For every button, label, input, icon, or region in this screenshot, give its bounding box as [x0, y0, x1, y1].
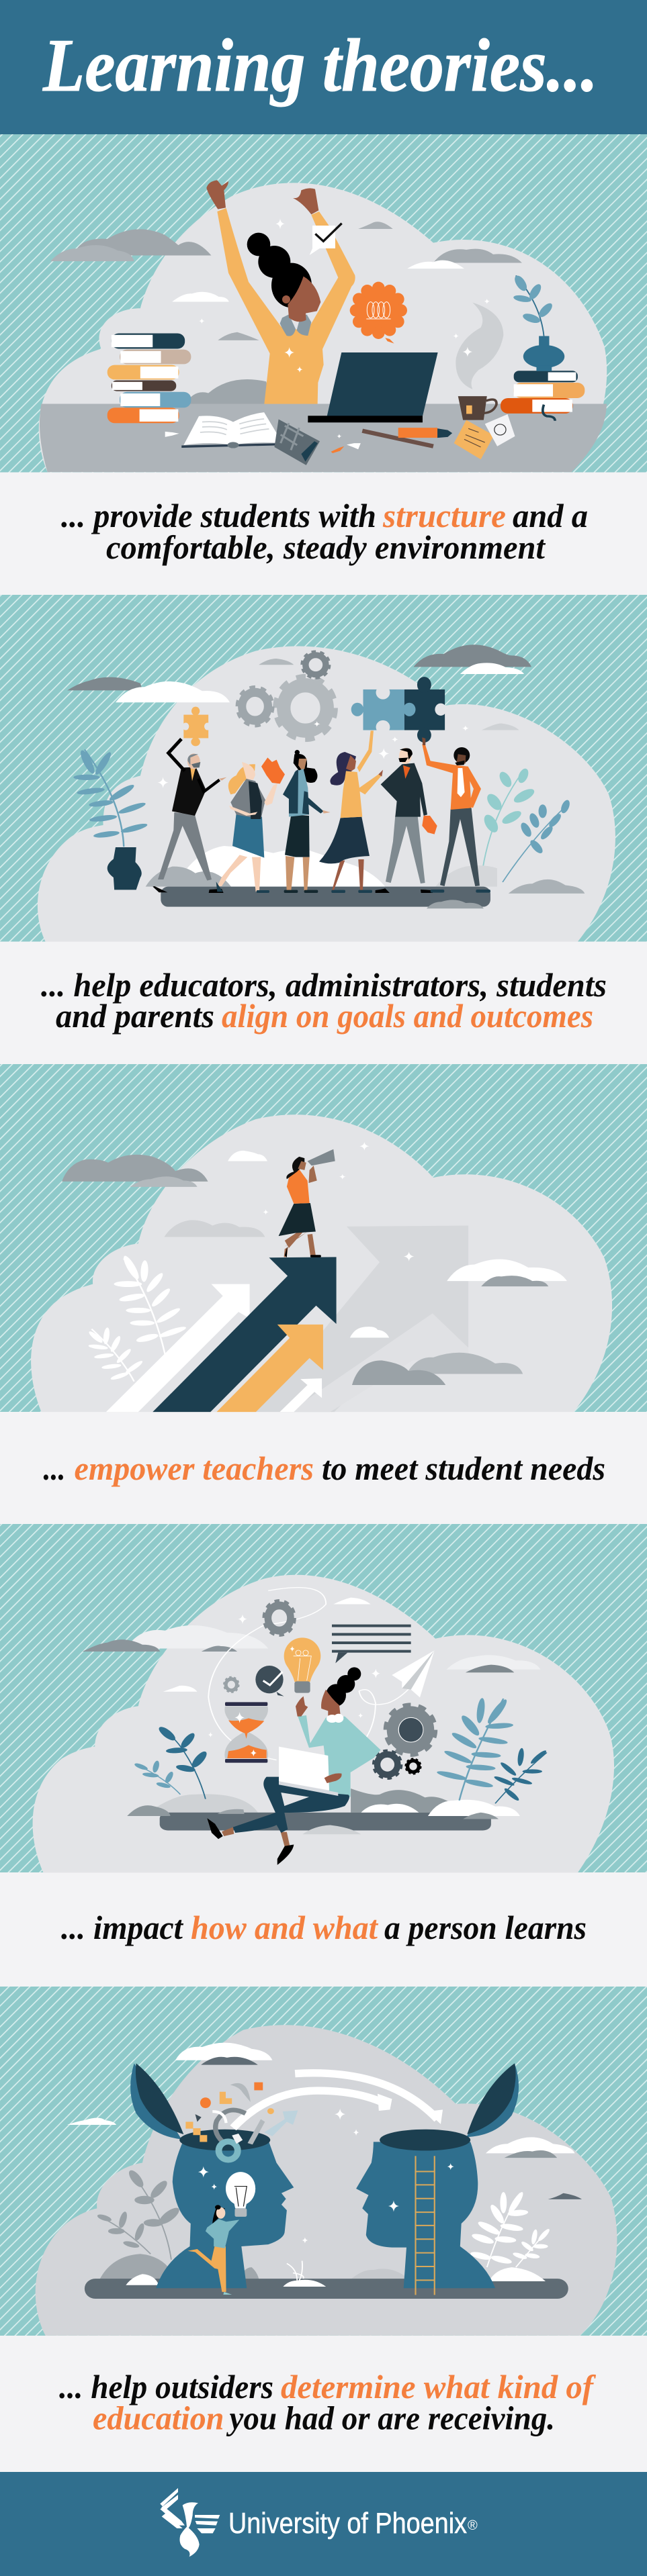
registered mark: ®	[468, 2518, 478, 2533]
left head	[130, 2063, 294, 2288]
cloud backdrop	[36, 2025, 617, 2336]
right head	[356, 2063, 519, 2288]
caption: determine education: you had or are receiving.	[226, 2399, 555, 2437]
steam	[456, 303, 503, 389]
white plant	[470, 2191, 551, 2267]
white hill and gray hills	[146, 846, 497, 887]
caption: structure: comfortable, steady environment	[106, 528, 546, 566]
caption: empower teachers: empower teachers	[74, 1449, 314, 1487]
caption: determine education: education	[93, 2399, 224, 2437]
large faded arrows	[256, 1226, 468, 1412]
panel: empowering teachers illustration	[0, 1064, 647, 1412]
puzzle pieces	[182, 677, 447, 746]
coffee cup	[458, 396, 497, 420]
person one: man holding piece	[153, 739, 226, 893]
right ferns	[481, 768, 571, 884]
panel: how and what a person learns illustration	[0, 1524, 647, 1872]
caption: align on goals	[41, 966, 607, 1035]
foreground clouds	[127, 1800, 520, 1834]
caption: how and what: a person learns	[384, 1909, 587, 1946]
lightbulb	[284, 1637, 320, 1693]
footer banner	[0, 2472, 647, 2576]
caption: empower teachers	[43, 1449, 605, 1487]
orbit lines	[208, 1588, 433, 1769]
caption: structure: and a	[513, 497, 588, 534]
caption: structure: structure	[382, 497, 506, 534]
cloud backdrop	[39, 183, 607, 472]
caption: empower teachers: ...	[43, 1449, 66, 1487]
left plants	[133, 1725, 210, 1799]
push pins	[165, 432, 361, 453]
paper plane	[392, 1650, 435, 1697]
platform	[161, 887, 490, 907]
sparkles	[263, 1142, 415, 1261]
logo: wordmark: University of Phoenix	[228, 2507, 467, 2540]
lightbulb held up	[226, 2172, 255, 2217]
caption: determine education: ... help outsiders	[59, 2368, 273, 2405]
background clouds	[67, 2043, 582, 2281]
caption: structure: ... provide students with	[61, 497, 376, 534]
speech lines	[332, 1626, 411, 1663]
stack of books and vase right	[501, 274, 585, 421]
ladder	[415, 2156, 435, 2295]
caption: how and what	[61, 1909, 587, 1946]
person two: woman with orange piece	[216, 757, 285, 893]
person four: woman reaching up	[319, 730, 383, 893]
background clouds	[62, 1151, 567, 1385]
platform	[160, 1813, 491, 1830]
gears	[224, 1601, 435, 1778]
logo: phoenix bird	[160, 2488, 220, 2557]
title: Learning theories...	[42, 24, 598, 107]
sticky notes	[454, 414, 515, 459]
person three: woman with glasses	[283, 750, 331, 893]
woman	[207, 1667, 381, 1839]
group of six people	[146, 730, 497, 908]
stack of books left	[107, 334, 191, 423]
arrows between heads	[233, 2073, 443, 2136]
cloud backdrop	[33, 1575, 614, 1872]
woman with telescope	[279, 1149, 335, 1257]
sparkles	[199, 299, 490, 438]
arrow: small white	[279, 1378, 322, 1412]
white leaf branches	[87, 1255, 187, 1382]
panel: team aligning puzzle pieces illustration	[0, 595, 647, 942]
ground platform	[85, 2279, 568, 2299]
checkmark note	[310, 224, 342, 255]
caption: how and what: ... impact	[61, 1909, 184, 1946]
laptop	[308, 352, 438, 422]
gray plant	[97, 2168, 182, 2260]
pen and marker	[362, 428, 452, 446]
caption: structure	[61, 497, 588, 566]
header banner	[0, 0, 647, 134]
lower leg and shoe	[277, 1832, 294, 1865]
arrow: yellow	[216, 1325, 323, 1412]
cloud backdrop	[31, 1114, 612, 1412]
cloud backdrop	[38, 646, 615, 942]
background clouds and hills	[83, 1598, 541, 1813]
background clouds	[67, 645, 585, 894]
arrow: dark	[153, 1257, 337, 1412]
person cheering with raised arms	[206, 180, 438, 422]
caption: align on goals: ... help educators, administrators, students	[41, 966, 607, 1004]
calculator	[274, 420, 320, 465]
small white mounds	[126, 2260, 546, 2287]
seated woman with lightbulb, gears and hourglass	[207, 1601, 435, 1839]
check bubble	[255, 1666, 284, 1697]
left plant in vase	[73, 749, 148, 890]
arrow: white	[106, 1284, 250, 1412]
caption: determine education	[59, 2368, 596, 2437]
flying shapes	[185, 2083, 274, 2160]
caption: empower teachers: to meet student needs	[322, 1449, 605, 1487]
desk surface	[40, 404, 607, 472]
caption: align on goals: and parents	[56, 997, 214, 1035]
hourglass	[224, 1702, 268, 1763]
orange speech badge	[350, 282, 407, 344]
small woman	[187, 2205, 239, 2295]
open book	[181, 412, 289, 448]
caption: determine education: determine what kind of	[281, 2368, 596, 2405]
sparkles	[198, 2109, 454, 2243]
panel: two heads exchanging ideas illustration	[0, 1987, 647, 2336]
person six: man in orange	[422, 737, 490, 893]
person five: man in suit	[376, 748, 437, 893]
right plants	[436, 1698, 548, 1803]
gears	[238, 652, 335, 738]
background clouds	[50, 222, 522, 404]
panel: structure and steady environment illustration	[0, 134, 647, 473]
caption: how and what: how and what	[191, 1909, 379, 1946]
caption: align on goals: align on goals and outcomes	[222, 997, 593, 1035]
